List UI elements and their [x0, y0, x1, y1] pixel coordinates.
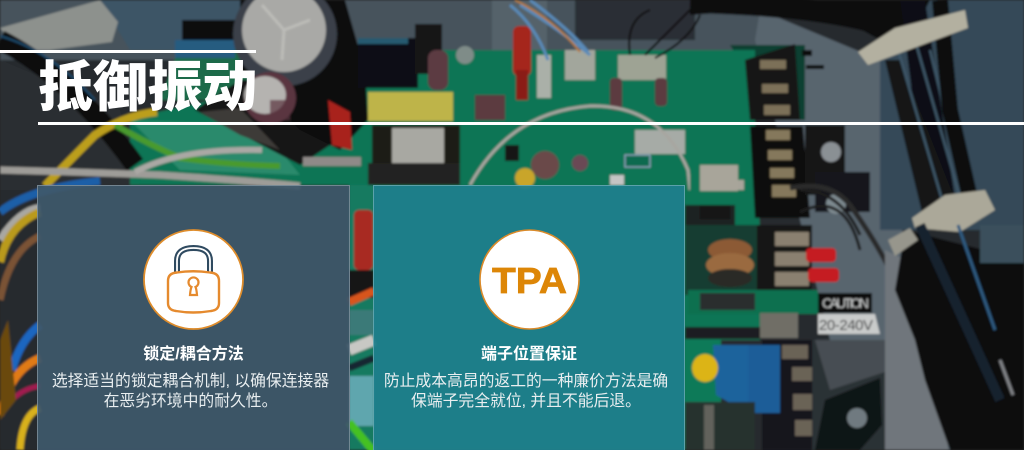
body text: 在恶劣环境中的耐久性。 [104, 393, 277, 410]
body text: 防止成本高昂的返工的一种廉价方法是确 [384, 373, 668, 390]
body text: 选择适当的锁定耦合机制, 以确保连接器 [52, 373, 329, 390]
top rule [0, 50, 256, 53]
red capacitor top [328, 100, 352, 150]
dark chips [358, 38, 418, 88]
capacitor small [244, 72, 296, 124]
heading: 锁定/耦合方法 [143, 346, 244, 363]
body text [384, 372, 668, 410]
metal chassis top [0, 0, 760, 60]
background photo: circuit board and wiring: CAUTION [822, 295, 869, 311]
between panels [349, 185, 374, 450]
background photo: circuit board and wiring: 20-240V [819, 317, 873, 334]
cable bundle [900, 0, 960, 230]
lower right [685, 225, 760, 295]
icon: TPA badge [479, 229, 580, 330]
icon: padlock [143, 229, 244, 330]
left wires [0, 40, 135, 165]
black cable mass right [895, 230, 1024, 450]
right metal [755, 10, 1024, 450]
top connector parts [492, 0, 547, 50]
PCB [130, 50, 760, 450]
title rule [38, 122, 1024, 125]
capacitor large [233, 0, 337, 86]
panel: terminal position assurance [373, 185, 685, 450]
body text [52, 372, 329, 410]
caution label [818, 293, 872, 313]
panel: locking and coupling methods [37, 185, 350, 450]
body text: 保端子完全就位, 并且不能后退。 [411, 393, 641, 410]
icon: TPA badge: TPA [492, 260, 567, 301]
title: 抵御振动 [38, 56, 257, 118]
big black area [240, 0, 368, 150]
heading: 端子位置保证 [481, 346, 577, 363]
